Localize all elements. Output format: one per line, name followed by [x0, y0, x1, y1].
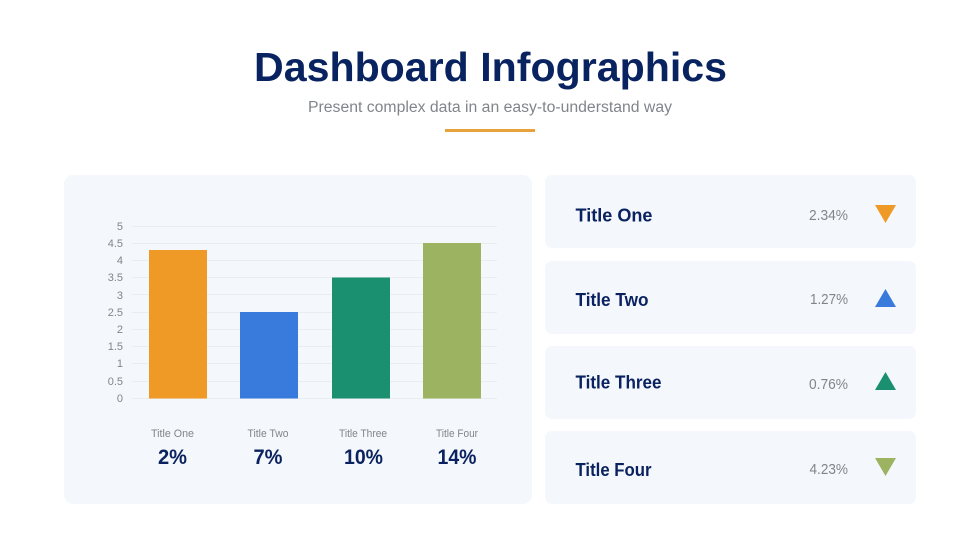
chart y-axis labels: 0.5: [108, 376, 123, 388]
title: Dashboard Infographics: [254, 44, 727, 90]
icon: blue up triangle: [875, 289, 896, 307]
card: Title One: 2.34%: [809, 208, 848, 224]
chart y-axis labels: 3.5: [108, 272, 123, 284]
bar: Title Three: [332, 278, 390, 398]
icon: green up triangle: [875, 372, 896, 390]
chart y-axis labels: 4: [117, 255, 123, 267]
chart y-axis labels: 1: [117, 358, 123, 370]
chart y-axis labels: 3: [117, 290, 123, 302]
category: Title Two 7%: 7%: [254, 445, 282, 469]
subtitle: Present complex data in an easy-to-understand way: [308, 99, 672, 116]
panel: bar chart: [64, 175, 532, 504]
bar: Title Four: [423, 243, 481, 398]
card: Title One: Title One: [576, 204, 652, 226]
category: Title Four 14%: [436, 428, 478, 469]
chart y-axis labels: 1.5: [108, 341, 123, 353]
chart y-axis labels: 5: [117, 221, 123, 233]
chart gridlines: [132, 226, 497, 398]
card: Title Three: [545, 346, 916, 419]
card: Title Four: Title Four: [576, 459, 652, 480]
card: Title Four: 4.23%: [810, 462, 848, 478]
icon: orange down triangle: [875, 205, 896, 223]
card: Title Four: [545, 431, 916, 504]
category: Title Two 7%: [248, 428, 288, 469]
category: Title Three 10%: Title Three: [339, 428, 387, 440]
category: Title Four 14%: Title Four: [436, 428, 478, 440]
category: Title Three 10%: [339, 428, 387, 469]
chart y-axis labels: 0: [117, 393, 123, 405]
card: Title Two: Title Two: [576, 289, 648, 310]
card: Title Three: 0.76%: [809, 377, 848, 393]
card: Title Two: [545, 261, 916, 334]
chart y-axis labels: [108, 221, 123, 405]
bar: Title One: [149, 250, 207, 398]
category: Title One 2%: 2%: [158, 445, 187, 469]
card: Title Three: Title Three: [576, 372, 662, 392]
accent underline: [445, 129, 535, 132]
category: Title Four 14%: 14%: [438, 445, 476, 469]
category: Title Two 7%: Title Two: [248, 428, 288, 440]
category: Title One 2%: Title One: [151, 428, 194, 440]
chart y-axis labels: 2.5: [108, 307, 123, 319]
chart y-axis labels: 2: [117, 324, 123, 336]
icon: olive down triangle: [875, 458, 896, 476]
card: Title Two: 1.27%: [810, 292, 848, 308]
bar: Title Two: [240, 312, 298, 398]
card: Title One: [545, 175, 916, 248]
chart y-axis labels: 4.5: [108, 238, 123, 250]
category: Title Three 10%: 10%: [344, 445, 383, 469]
category: Title One 2%: [151, 428, 194, 469]
